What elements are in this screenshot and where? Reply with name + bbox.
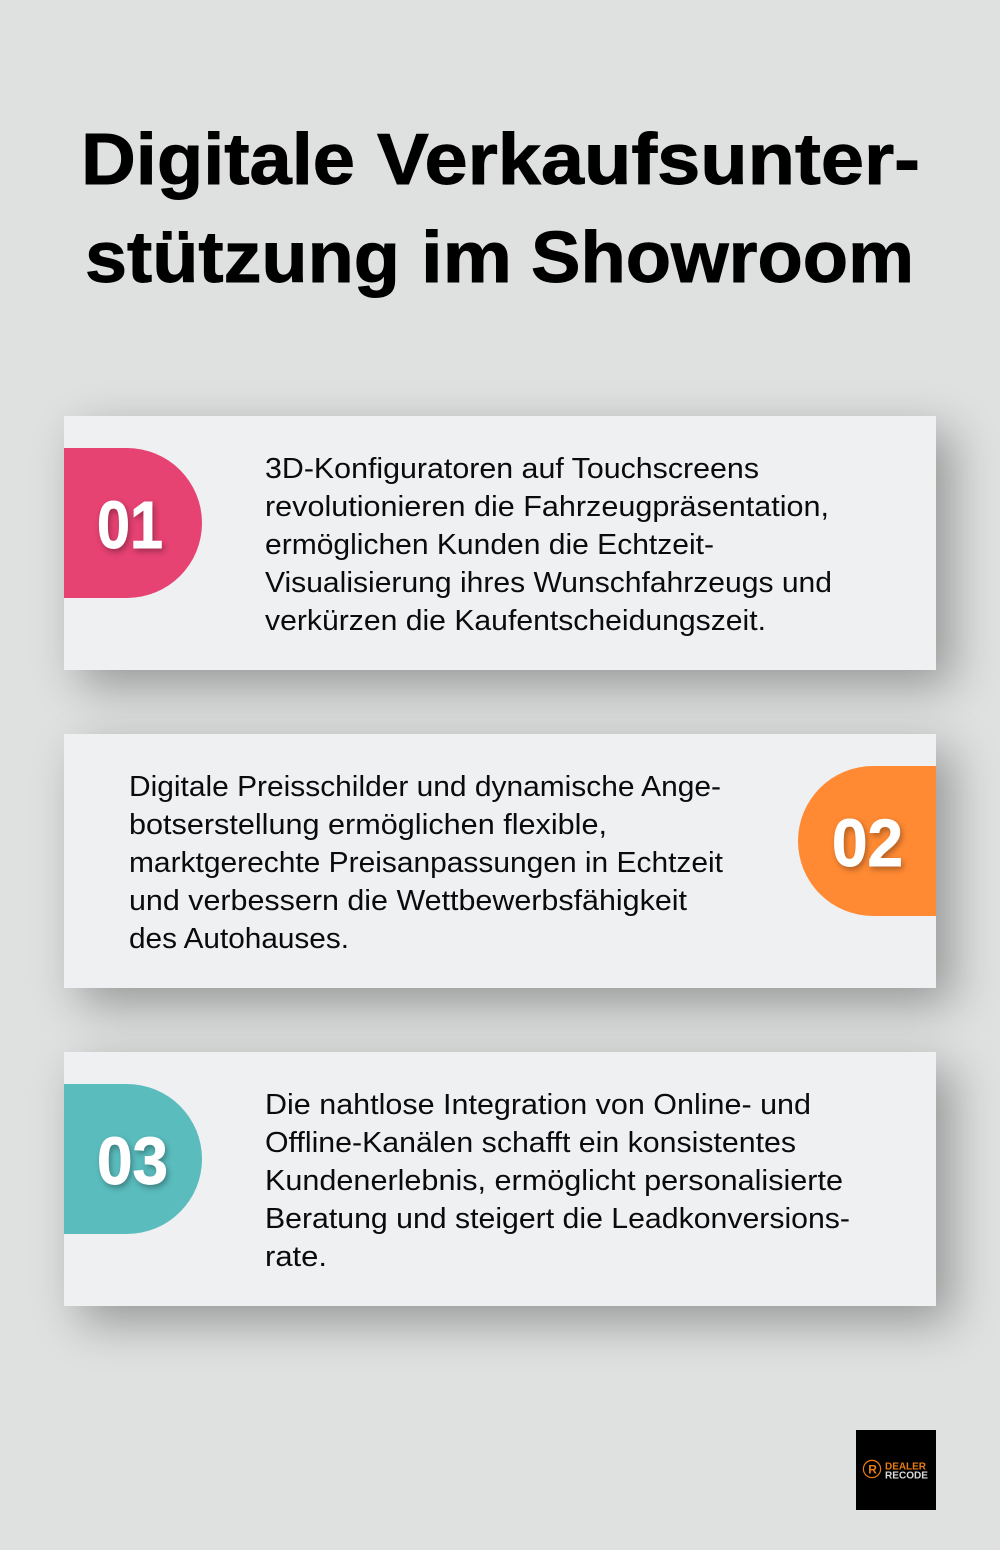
text block: step 02: des Autohauses. xyxy=(129,923,349,955)
text block: step 02: marktgerechte Preisanpassungen in Echtzeit xyxy=(129,847,723,879)
text block: step 02: Digitale Preisschilder und dynamische Ange- xyxy=(129,771,721,803)
text block: step 02: botserstellung ermöglichen flexible, xyxy=(129,809,607,841)
number 03: 03 xyxy=(97,1124,168,1199)
number 02: 02 xyxy=(832,806,903,881)
panel: step 02 xyxy=(64,734,936,988)
text block: step 02 xyxy=(129,771,723,955)
text block: step 03: Die nahtlose Integration von Online- und xyxy=(265,1089,811,1121)
number 01: 01 xyxy=(97,488,163,563)
panel: step 03 xyxy=(64,1052,936,1306)
badge: 03 xyxy=(64,1084,202,1234)
title: Verkaufsunter- xyxy=(377,120,920,200)
text block: step 01: 3D-Konfiguratoren auf Touchscreens xyxy=(265,453,759,485)
logo: Dealer Recode: R xyxy=(868,1462,877,1476)
title: stützung xyxy=(85,218,400,298)
text block: step 01: revolutionieren die Fahrzeugpräsentation, xyxy=(265,491,829,523)
text block: step 03: rate. xyxy=(265,1241,327,1273)
panel: step 01 xyxy=(64,416,936,670)
text block: step 02: und verbessern die Wettbewerbsfähigkeit xyxy=(129,885,687,917)
text block: step 03: Kundenerlebnis, ermöglicht personalisierte xyxy=(265,1165,843,1197)
text block: step 03 xyxy=(265,1089,850,1273)
text block: step 01: verkürzen die Kaufentscheidungszeit. xyxy=(265,605,766,637)
title xyxy=(81,120,920,298)
badge: 02 xyxy=(798,766,936,916)
logo: Dealer Recode xyxy=(856,1430,936,1510)
text block: step 03: Offline-Kanälen schafft ein konsistentes xyxy=(265,1127,796,1159)
logo: Dealer Recode: DEALER xyxy=(885,1461,927,1472)
logo: Dealer Recode: RECODE xyxy=(885,1470,928,1481)
text block: step 01: ermöglichen Kunden die Echtzeit- xyxy=(265,529,714,561)
text block: step 03: Beratung und steigert die Leadkonversions- xyxy=(265,1203,850,1235)
badge: 01 xyxy=(64,448,202,598)
text block: step 01: Visualisierung ihres Wunschfahrzeugs und xyxy=(265,567,832,599)
text block: step 01 xyxy=(265,453,832,637)
title: Digitale xyxy=(81,120,355,200)
title: im xyxy=(421,218,512,298)
title: Showroom xyxy=(531,218,914,298)
